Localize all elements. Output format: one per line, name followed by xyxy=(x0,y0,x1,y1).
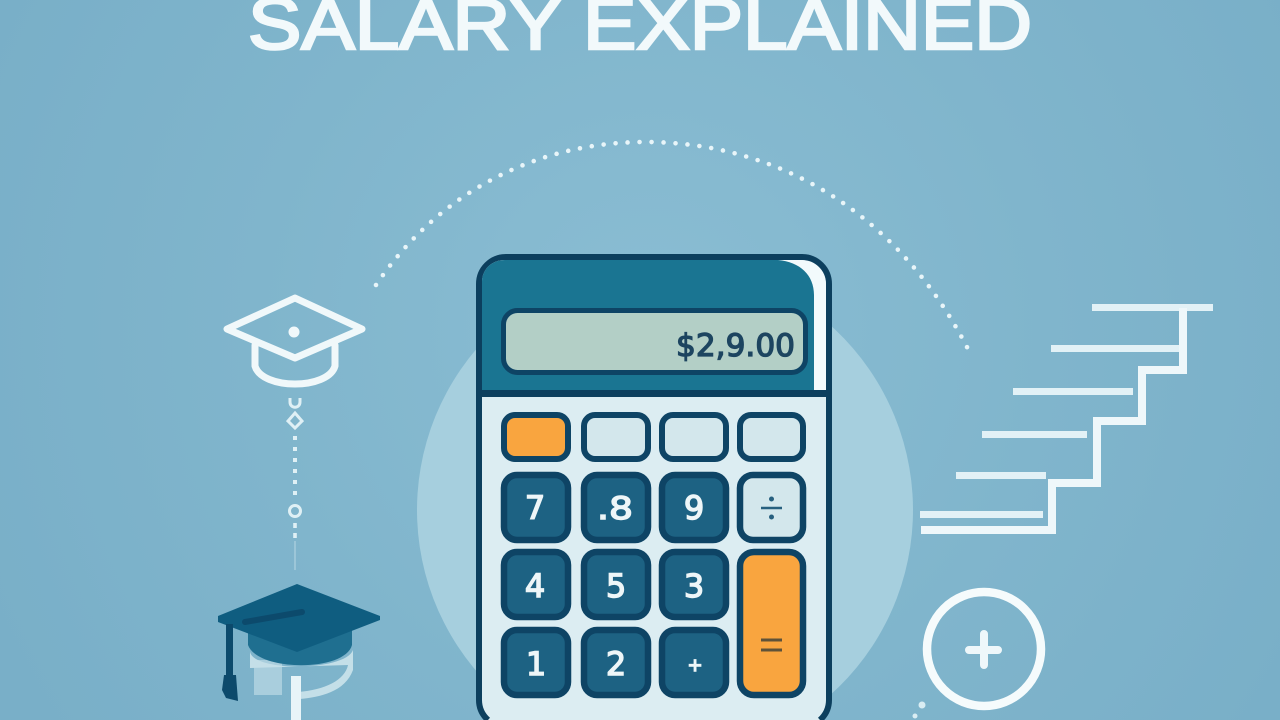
dotted connector xyxy=(288,398,302,570)
number keys xyxy=(504,475,726,695)
top row keys xyxy=(504,415,803,459)
calculator body xyxy=(479,257,829,720)
dotted arc xyxy=(376,142,969,351)
divide key xyxy=(740,475,803,540)
key labels: 2 xyxy=(606,645,626,683)
icon: solid graduation cap xyxy=(218,584,380,720)
key labels: 4 xyxy=(525,567,545,605)
key labels: 5 xyxy=(606,567,626,605)
key labels: 9 xyxy=(684,489,704,527)
calculator xyxy=(479,257,829,720)
icon: plus in circle xyxy=(927,592,1041,706)
key labels: 1 xyxy=(526,645,546,683)
background circle xyxy=(417,262,913,720)
calculator display: $2,9.00 xyxy=(676,328,795,364)
dots near plus xyxy=(912,702,926,718)
calculator display xyxy=(504,310,806,372)
equals key xyxy=(740,552,803,695)
key labels: .8 xyxy=(597,491,633,527)
icon: outlined graduation cap xyxy=(227,298,362,384)
key labels: + xyxy=(687,655,703,676)
key labels xyxy=(525,489,704,683)
key labels: 3 xyxy=(684,567,704,605)
calculator header xyxy=(479,260,829,397)
key labels: 7 xyxy=(525,489,545,527)
icon: stair steps xyxy=(920,304,1213,530)
